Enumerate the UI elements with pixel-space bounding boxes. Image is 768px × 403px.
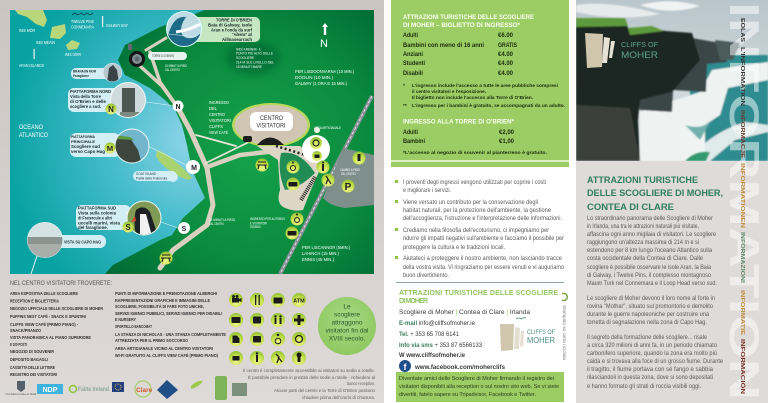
callout: history circle: scogliere: [334, 312, 360, 318]
recycled paper note: Stampato su carta riciclata: [562, 305, 567, 361]
drop-off loop: [257, 146, 322, 211]
list: facilities column 1: AREA ESPOSITIVA DELLE SCOGLIERE: [10, 291, 78, 296]
list: facilities column 1: RECEPTION E BIGLIETTERIA: [10, 298, 60, 304]
map labels: PER LISDOONVARNA (10 MIN.): [295, 69, 354, 74]
sponsor logos: Comhairle Contae an Chláir: [6, 393, 37, 396]
accessibility note: [243, 368, 375, 400]
contact details: Info via sms + 353 87 6566133: [399, 343, 483, 349]
photo: cliffs of moher: [576, 0, 768, 161]
map labels: 214 M SUL LIVELLO DEL: [236, 60, 274, 64]
accessibility note: chiudere prima dell'orario di chiusura.: [302, 395, 375, 400]
ticket heading: ATTRAZIONI TURISTICHE DELLE SCOGLIERE: [403, 14, 535, 21]
title: DELLE SCOGLIERE DI MOHER,: [587, 188, 723, 199]
panel: map: BRANAUN MOR: [73, 70, 96, 74]
map labels: ATLANTICO: [19, 133, 48, 139]
body text: a circa 320 milioni di anni fa, in un periodo chiamato: [587, 343, 718, 349]
panel: map: N: [108, 105, 114, 114]
bullet list: [395, 180, 565, 279]
map labels: INIS MÓR: [19, 28, 35, 33]
tower ticket section: €1,00: [499, 139, 515, 145]
callouts with photos: Aran e l'onda da surf: [211, 28, 252, 32]
callout: history circle: [318, 297, 376, 355]
list: facilities column 2: WI-FI GRATUITO AL CLIFFS VIEW CAFÉ (PRIMO PIANO): [115, 351, 218, 358]
bullet list: ridurre gli impatti negativi sull'ambiente e facciamo il possibile per: [403, 236, 564, 242]
icon: facebook: f: [404, 362, 408, 372]
tower ticket section: Adulti: [403, 130, 418, 136]
list: facilities column 1: REGISTRO DEI VISITATORI: [10, 372, 57, 377]
panel: map: PRINCIPALE: [71, 140, 95, 144]
body text: Maum Turk nel Connemara e il Loop Head verso sud.: [587, 281, 717, 287]
map labels: [19, 13, 360, 262]
callouts with photos: "Aileens" ad: [232, 32, 252, 37]
body text: estendono per 8 km lungo l'oceano Atlantico sulla: [587, 248, 713, 254]
map labels: DAL CENTRO: [341, 172, 356, 176]
panel: map: PIATTAFORMA NORD: [70, 89, 112, 94]
map labels: CAMBIO A PIEDI: [340, 168, 360, 172]
centre label: [250, 112, 293, 131]
contact details: Tel. + 353 65 708 6141: [399, 332, 460, 338]
panel: map: Faraglione: [73, 74, 89, 78]
title: [587, 175, 723, 213]
heading: visitor centre: NEL CENTRO VISITATORI TROVERETE:: [10, 280, 112, 287]
map letter markers: M: [191, 165, 197, 172]
vertical watermark: INFORMATION: [721, 2, 768, 400]
map labels: GALWAY (1 ORA E 15 MIN.): [295, 81, 347, 86]
price table: Adulti: [403, 33, 418, 39]
callouts with photos: Aillnasearrach: [222, 37, 252, 42]
islands: [15, 10, 80, 50]
bullet list: e migliorare i servizi.: [403, 188, 451, 194]
panel: map: VISTA SU CAPO HAG: [64, 240, 101, 244]
list: facilities column 2: RAPPRESENTAZIONI GRAFICHE E IMMAGINI DELLE: [115, 298, 210, 303]
bullet list: I proventi degli ingressi vengono utilizzati per coprire i costi: [403, 180, 546, 186]
paths: [140, 38, 285, 268]
tower ticket section: Bambini: [403, 139, 425, 145]
dark oval behind viewpoint note: [226, 41, 280, 75]
price notes: il centro visitatori e l'esposizione.: [412, 89, 487, 95]
price table: GRATIS: [498, 43, 517, 49]
sponsor logos: Clare: [136, 387, 153, 394]
list: facilities column 1: VISTA PANORAMICA AL PIANO SUPERIORE: [10, 335, 91, 340]
body text: scogliere è possibile osservare le isole Aran, la Baia: [587, 265, 712, 271]
sponsor logos: [6, 376, 247, 400]
map labels: ARAN ISLANDS: [19, 63, 44, 68]
pointer lines: [31, 34, 197, 274]
body text: calda e si trovava alla foce di un grosso fiume. Durante: [587, 359, 724, 365]
title: ATTRAZIONI TURISTICHE: [587, 175, 698, 186]
icon: facebook: [399, 360, 411, 372]
bullet list: Viene versato un contributo per la conservazione degli: [403, 200, 538, 206]
body text: durante le guerre napoleoniche per costruire una: [587, 312, 710, 318]
body text: affascina ogni anno migliaia di visitatori. Le scogliere: [587, 232, 717, 238]
price notes: L'ingresso per i bambini è gratuito, se accompagnati da un adulto.: [412, 103, 566, 109]
vertical languages: [739, 18, 747, 394]
map labels: DOOLIN (10 MIN.): [295, 75, 334, 80]
title: CONTEA DI CLARE: [587, 202, 674, 213]
price table: €4.00: [498, 52, 514, 58]
friends box: divertiti, fatelo sapere su Tripadvisor, Facebook e Twitter.: [399, 392, 536, 398]
panel: map: Vista sulla colonia: [78, 210, 116, 216]
panel: map: uccelli marini, vista: [78, 220, 120, 226]
map letter markers: S: [182, 226, 187, 233]
panel: map: di Fratercule e altri: [78, 216, 112, 220]
north arrow: N: [320, 38, 328, 50]
body text: torretta di segnalazione nella zona di Capo Hag.: [587, 320, 707, 326]
bullet list: dell'accoglienza, l'istruzione e l'interpretazione delle informazioni.: [403, 216, 562, 222]
callouts with photos: [166, 11, 260, 47]
panel: map: di O'Brien e delle: [70, 99, 106, 104]
contact details: E-mail info@cliffsofmoher.ie: [399, 321, 476, 327]
bullet list: Crediamo nella filosofia dell'ecoturismo, ci impegniamo per: [403, 228, 549, 234]
price notes: **: [403, 103, 407, 109]
panel: map: [10, 10, 374, 274]
goat island: [156, 150, 192, 180]
map labels: INGRESSO: [209, 100, 229, 106]
tower ticket section: INGRESSO ALLA TORRE DI O'BRIEN*: [403, 118, 514, 126]
vertical languages: INFORMACJE: [739, 110, 745, 159]
map letter markers: N: [175, 104, 181, 111]
price table: [403, 33, 517, 77]
vertical languages: INFORMACIÓN: [739, 339, 747, 394]
map labels: PER LISCANNOR (5MIN.): [302, 245, 350, 250]
map icons: P: [345, 182, 352, 193]
callouts with photos: TORRE DI O'BRIEN: [216, 18, 253, 22]
map labels: SCOGLIERE: [236, 56, 255, 60]
panel: map: PIATTAFORMA SUD: [78, 206, 117, 210]
list: facilities column 1: CLIFFS VIEW CAFÉ (PRIMO PIANO) -: [10, 320, 78, 327]
contact heading: [399, 290, 558, 305]
price table: €6.00: [498, 33, 514, 39]
body text: raggiungono un'altezza massima di 214 m e si: [587, 240, 699, 246]
vertical languages: EOLAS: [739, 18, 745, 43]
map labels: AREA ARTIGIANALE: [314, 126, 342, 130]
vertical languages: L'INFORMATION: [739, 47, 745, 106]
map labels: INIS OÍRR: [65, 52, 81, 57]
map labels: E VISITATORI: [250, 222, 267, 226]
ticket heading: DI MOHER – BIGLIETTO DI INGRESSO*: [403, 22, 520, 29]
map labels: ANDÚ KAMÓMAN - IL: [236, 46, 261, 52]
callout: history circle: attraggono: [331, 320, 363, 326]
map labels: CENTRO: [209, 112, 225, 118]
body text: rovina "Mothar", situato sul promontorio e demolito: [587, 304, 714, 310]
list: facilities column 2: SCOGLIERE, POSSIBILITÀ DI FARE FOTO UNICHE,: [115, 303, 204, 309]
white blobs: [302, 135, 330, 163]
map labels: VIEW CAFÉ: [209, 129, 228, 136]
map labels: 15 MINUTI A PIEDI: [165, 64, 187, 68]
callout: history circle: visitatori fin dal: [326, 328, 369, 334]
vertical languages: INFORMAZIONI: [739, 232, 745, 284]
panel: map: verso Capo Hag: [71, 149, 105, 154]
map labels: TWELVE PINS: [71, 19, 94, 24]
list: facilities column 2: SERVIZI IGIENICI PUBBLICI, SERVIZI IGIENICI PER DISABILI: [115, 311, 222, 316]
list: facilities column 2: LA STANZA DI NICHOLAS - UNA STANZA COMPLETAMENTE: [115, 332, 226, 337]
friends box: visitatori disponibili alla reception o sul nostro sito web. Se vi siete: [399, 384, 559, 390]
map labels: 14 MINUTI A PIEDI: [209, 218, 235, 222]
body text: il tragitto, il fiume portava con sé fango e sabbia: [587, 367, 714, 373]
centre label: VISITATORI: [256, 124, 286, 130]
list: facilities column 1: DEPOSITO BAGAGLI: [10, 357, 48, 362]
logo: cliffs of moher: [500, 318, 555, 351]
callout: history circle: XVIII secolo.: [329, 336, 365, 342]
price table: Bambini con meno di 16 anni: [403, 43, 484, 49]
panel: map: Vista della Torre: [70, 94, 101, 99]
map labels: INGRESSO PER AUTOBUS: [250, 217, 285, 221]
map labels: LAHINCH (15 MIN.): [302, 251, 340, 256]
map labels: CONNEMARA: [71, 24, 94, 30]
price table: Studenti: [403, 61, 425, 67]
list: facilities column 2: [115, 291, 226, 358]
list: facilities column 1: CASSETTA DELLE LETTERE: [10, 365, 55, 370]
list: facilities column 2: AREA ARTIGIANALE VICINO AL CENTRO VISITATORI: [115, 346, 213, 351]
vertical languages: INFORMATIONEN: [739, 163, 745, 228]
map labels: DAL CENTRO: [209, 222, 224, 226]
body text: Lo straordinario panorama delle Scogliere di Moher: [587, 216, 713, 222]
tower ticket section: [403, 118, 548, 156]
ticket heading: [403, 14, 535, 29]
map labels: OCEANO: [19, 125, 43, 131]
panel: cliffs information: [576, 0, 768, 403]
map labels: DISABILI: [250, 225, 261, 229]
body text: e hanno formato gli strati di roccia visibili oggi.: [587, 384, 701, 390]
accessibility note: Alcune parti del centro e la Torre di O'Brien possono: [274, 388, 375, 393]
contact details: W www.cliffsofmoher.ie: [399, 353, 466, 359]
logo: cliffs of moher: MOHER: [527, 336, 555, 345]
logo: cliffs of moher: CLIFFS OF: [527, 329, 555, 336]
sponsor logos: Fáilte Ireland: [78, 386, 109, 393]
map labels: GALWAY BAY: [106, 23, 128, 28]
friends box: Diventate amici delle Scogliere di Moher firmando il registro dei: [399, 376, 554, 382]
land mass: [105, 10, 374, 274]
accessibility note: È possibile prendere in prestito delle sedie a rotelle - richiedere al: [248, 374, 375, 380]
bullet list: della vostra visita. Vi ringraziamo per essere venuti e vi auguriamo: [403, 265, 565, 271]
facebook address: www.facebook.com/moherclifs: [414, 365, 506, 371]
sponsor logos: NDP: [43, 387, 58, 394]
map labels: 15 MINUTI MARE: [236, 65, 263, 69]
bullet list: buon divertimento.: [403, 273, 449, 279]
visitor centre oval: [232, 103, 310, 147]
map labels: ENNIS (45 MIN.): [302, 257, 335, 262]
bullet list: habitat naturali, per la protezione dell'ambiente, la gestione: [403, 208, 552, 214]
price notes: L'ingresso include l'accesso a tutte le aree pubbliche compresi: [412, 83, 559, 89]
map labels: PUNTO PIÙ ALTO DELLE: [236, 50, 274, 56]
list: facilities column 2: SPORTELLO BANCOMAT: [115, 324, 152, 329]
list: facilities column 1: [10, 291, 104, 377]
friends box: [396, 372, 564, 402]
list: facilities column 1: SNACK/PRANZO: [10, 328, 41, 333]
map labels: VISITATORI: [209, 118, 231, 124]
accessibility note: Il centro è completamente accessibile ai visitatori su sedia a rotelle.: [243, 368, 375, 373]
callout: history circle: Le: [343, 304, 351, 310]
price table: Disabili: [403, 71, 423, 77]
icon grid: services: [229, 293, 306, 365]
list: facilities column 2: ATTREZZATA PER IL PRIMO SOCCORSO: [115, 338, 188, 343]
body text: costa occidentale della Contea di Clare. Dalle: [587, 256, 704, 262]
tower label pill: TORRE DI O'BRIEN: [152, 54, 174, 58]
body text: di Galway, i Twelve Pins, il complesso montagnoso: [587, 273, 712, 279]
panel: map: M: [107, 144, 113, 153]
vertical languages: INFORMATIE: [739, 290, 745, 336]
panel: map: scogliere a sud.: [70, 104, 101, 109]
price notes: Il biglietto non include l'accesso alla Torre di O'Brien.: [412, 95, 534, 101]
panel: map: del faraglione.: [78, 225, 108, 230]
list: facilities column 2: E NURSERY: [115, 317, 136, 322]
panel: map: Patria della Fratercula: [136, 176, 167, 180]
callouts with photos: Baia di Galway, Isole: [208, 22, 252, 28]
road: [280, 96, 372, 274]
panel: ticket prices and contacts: [384, 0, 576, 403]
map labels: CLIFFS: [209, 124, 223, 130]
list: facilities column 1: E 100 POSTI: [10, 342, 27, 347]
map icons: [160, 127, 366, 264]
tower roundabout: [128, 44, 145, 67]
body text: Le scogliere di Moher devono il loro nome al forte in: [587, 296, 715, 302]
body text: rilasciandoli in questa zona, dove si sono depositati: [587, 375, 713, 381]
body text: carbonifero superiore, quando la zona era molto più: [587, 351, 717, 357]
logo on photo: [585, 33, 658, 68]
tower ticket section: *L'accesso al negozio di souvenir al pianterreno è gratuito.: [403, 150, 548, 156]
contact details: [399, 309, 530, 359]
logo on photo: MOHER: [621, 50, 658, 61]
map labels: DAL CENTRO: [165, 68, 180, 72]
list: facilities column 1: NEGOZIO DI SOUVENIR: [10, 349, 55, 354]
body text: [587, 216, 724, 390]
list: facilities column 2: PUNTI DI INFORMAZIONE E PRENOTAZIONE ALBERGHI: [115, 291, 217, 296]
north arrow: [320, 23, 328, 47]
tower label pill: [148, 52, 187, 60]
price notes: [403, 83, 566, 109]
panel: map: Scogliere sud: [71, 144, 100, 149]
tower ticket section: €2,00: [499, 130, 515, 136]
contact heading: DI MOHER: [399, 298, 428, 305]
body text: Il segreto della formazione delle scogliere... risale: [587, 335, 708, 341]
map labels: INIS MEÁIN: [36, 40, 55, 45]
map letter markers: [175, 104, 197, 233]
panel: map: PIATTAFORMA: [71, 135, 95, 139]
icon grid: services: ATM: [293, 298, 305, 304]
list: facilities column 1: NEGOZIO UFFICIALE DELLE SCOGLIERE DI MOHER: [10, 306, 104, 311]
price table: Anziani: [403, 52, 423, 58]
price notes: *: [403, 83, 405, 89]
accessibility note: banco reception.: [347, 381, 375, 386]
map labels: DEL: [209, 106, 217, 112]
contact heading: ATTRAZIONI TURISTICHE DELLE SCOGLIERE: [399, 290, 558, 297]
car park area: [323, 148, 374, 208]
list: facilities column 1: PUFFINS NEST CAFÉ - SNACK E SPUNTINI: [10, 312, 86, 319]
bullet list: Aiutateci a proteggere il nostro ambiente, non lasciando tracce: [403, 256, 563, 262]
price table: €4.00: [498, 71, 514, 77]
panel: map: S: [125, 223, 131, 232]
body text: in Irlanda, una tra le attrazioni naturali più visitate,: [587, 224, 699, 230]
contact details: Scogliere di Moher | Contea di Clare | Irlanda: [399, 309, 530, 316]
bullet list: proteggere la cultura e le tradizioni locali.: [403, 245, 505, 251]
centre label: CENTRO: [260, 116, 283, 122]
logo on photo: CLIFFS OF: [621, 40, 658, 49]
price table: €4.00: [498, 61, 514, 67]
panel: map: GOAT ISLAND: [136, 172, 156, 176]
